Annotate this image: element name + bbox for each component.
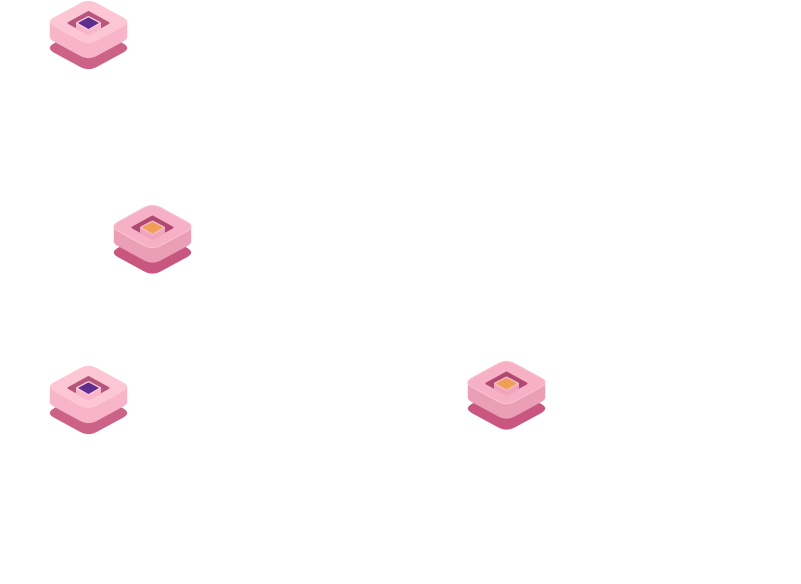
icon: orange layered block, middle left — [114, 205, 191, 274]
icon: purple layered block, top left — [50, 1, 127, 69]
icon: purple layered block, lower left — [50, 366, 127, 434]
icon: orange layered block, lower right — [468, 361, 545, 430]
